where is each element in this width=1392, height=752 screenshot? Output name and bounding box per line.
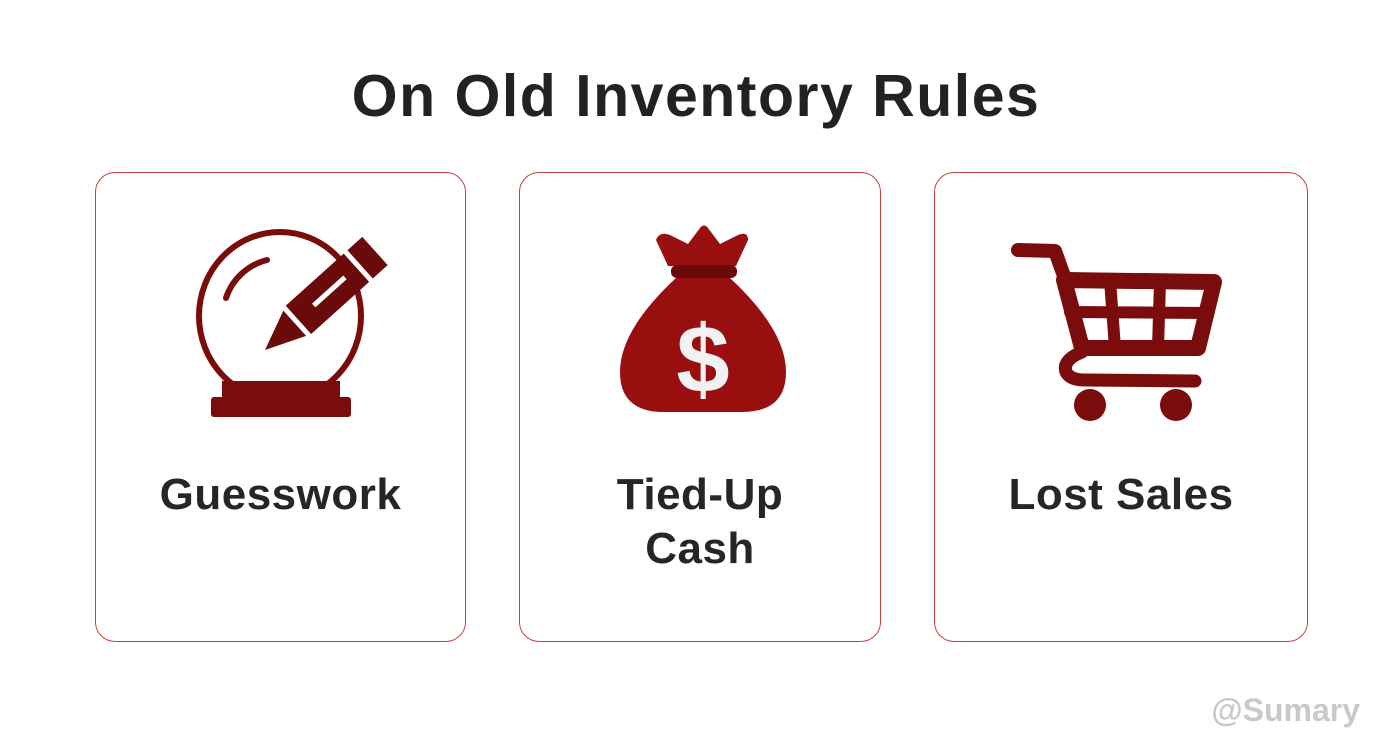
panel: guesswork xyxy=(95,172,466,642)
label: tied-up cash: Tied-Up xyxy=(617,470,783,519)
icon: crystal ball with pencil xyxy=(199,232,388,417)
icon: shopping cart xyxy=(1018,250,1214,421)
panel: tied-up cash xyxy=(519,172,881,642)
watermark: @Sumary xyxy=(1211,692,1360,728)
label: tied-up cash: Cash xyxy=(645,524,755,573)
label: tied-up cash xyxy=(617,470,783,573)
icon: money bag: $ xyxy=(676,306,730,413)
label: guesswork: Guesswork xyxy=(160,470,401,519)
title: On Old Inventory Rules xyxy=(352,63,1040,129)
icon: money bag xyxy=(620,226,786,413)
label: lost sales: Lost Sales xyxy=(1008,470,1234,519)
panel: lost sales xyxy=(934,172,1308,642)
